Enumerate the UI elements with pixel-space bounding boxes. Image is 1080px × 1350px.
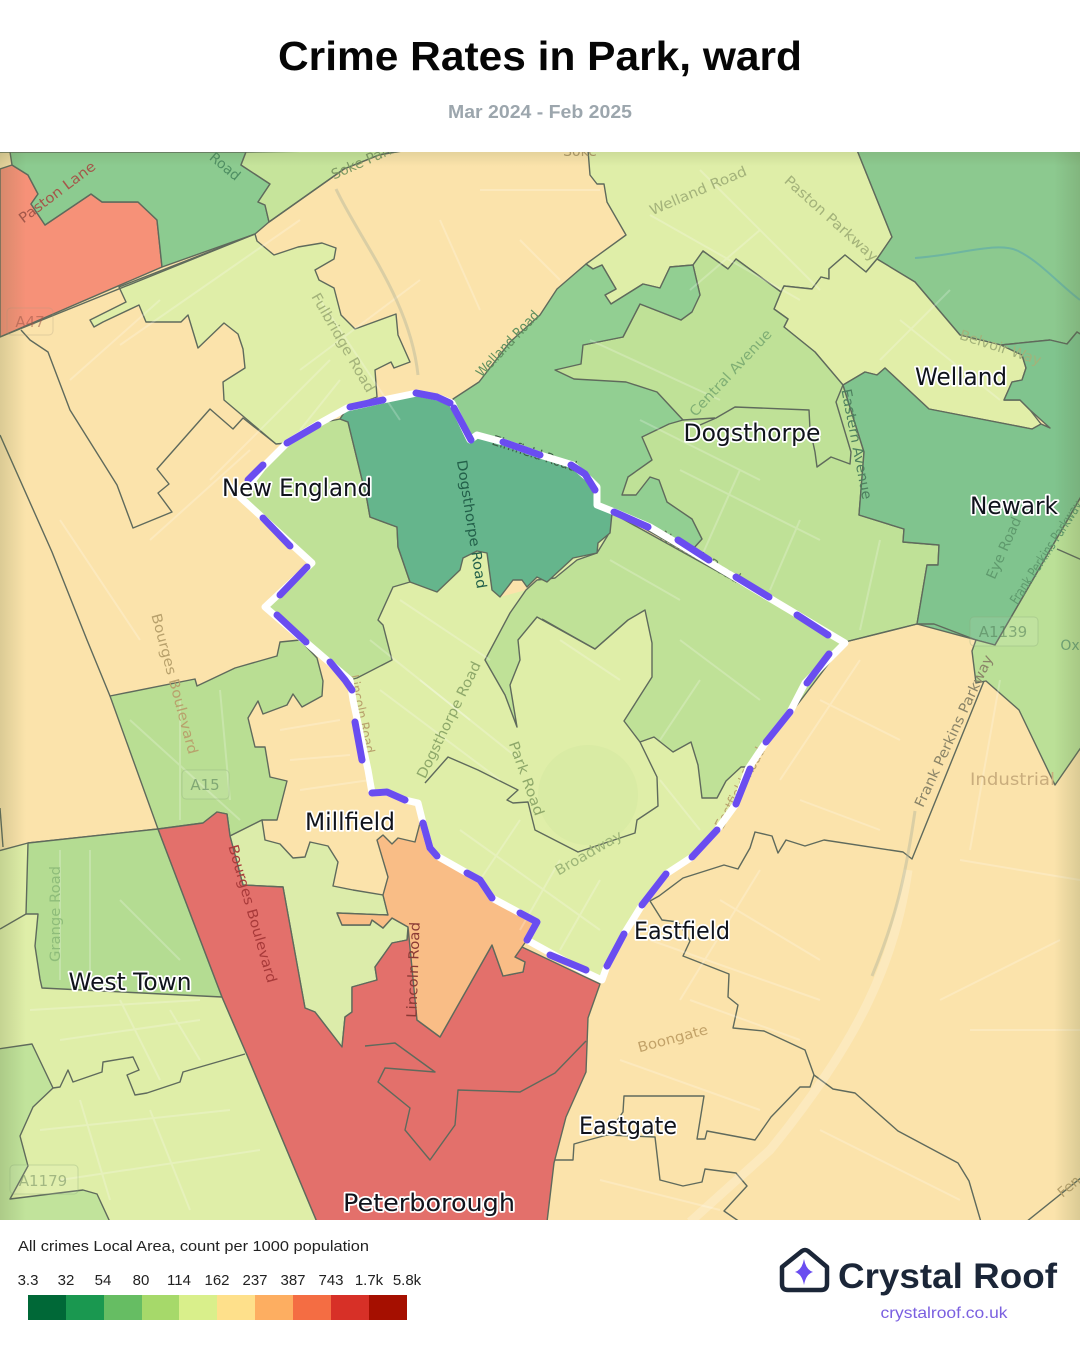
road labels: Eastfield Road <box>712 745 769 832</box>
road shield: A1139: A1139 <box>979 623 1027 641</box>
legend values: 162 <box>204 1272 230 1289</box>
road labels: Bourges Boulevard <box>147 612 200 756</box>
legend <box>18 1238 422 1320</box>
zone: pale Welland north <box>586 150 892 304</box>
place labels: Eastfield <box>634 917 730 945</box>
ward park area <box>538 745 638 845</box>
place labels: Peterborough <box>343 1189 515 1217</box>
zone: Newark green <box>843 332 1080 645</box>
wide road east <box>690 870 908 1222</box>
zone: pale Lincoln Road strip <box>230 820 408 1047</box>
road labels: Paston Parkway <box>781 173 881 265</box>
legend values: 237 <box>242 1272 268 1289</box>
river <box>915 247 1080 300</box>
road labels: Dogsthorpe Road <box>414 659 485 781</box>
place labels: Newark <box>970 492 1058 520</box>
zone: pale Welland <box>774 255 1050 432</box>
road labels: Bourges Boulevard <box>224 843 279 985</box>
road labels: Park Road <box>505 739 547 818</box>
area label: Industrial: Industrial <box>970 770 1055 790</box>
zone: pale Fulbridge <box>90 234 410 444</box>
road labels: Lincoln Road <box>404 922 424 1018</box>
zone: light green north <box>241 150 400 222</box>
zone: Bourges green <box>110 640 323 836</box>
road labels: Soke Parkway <box>329 129 424 183</box>
road labels: Lincoln Road <box>345 673 377 755</box>
road labels <box>16 129 1080 1201</box>
legend values: 387 <box>280 1272 306 1289</box>
title: Crime Rates in Park, ward <box>278 33 802 79</box>
zone: ward east light green <box>485 513 845 798</box>
place labels: Welland <box>915 363 1007 391</box>
road labels: Central Avenue <box>687 326 775 420</box>
road shield: A15 <box>182 770 229 799</box>
legend values: 114 <box>167 1272 191 1289</box>
place labels: Millfield <box>305 808 395 836</box>
road labels: Frank Perkins Parkway <box>912 653 997 810</box>
ward boundary: white casing <box>240 393 845 980</box>
place labels: West Town <box>68 968 192 996</box>
place labels: Eastgate <box>579 1112 677 1140</box>
legend values <box>18 1272 422 1289</box>
place labels: New England <box>222 474 372 502</box>
zone: ward west light green <box>240 419 410 680</box>
legend title: All crimes Local Area, count per 1000 population <box>18 1238 369 1255</box>
ward boundary: purple dashes <box>248 393 829 970</box>
road labels: Paston Lane <box>16 159 99 227</box>
road labels: Ox <box>1060 638 1080 654</box>
zone: ward pale base <box>354 538 744 975</box>
road shield: A1179 <box>10 1165 78 1194</box>
road shield: A1139 <box>970 617 1038 646</box>
legend values: 3.3 <box>18 1272 38 1289</box>
road labels: Soke <box>563 144 597 160</box>
road labels: Welland Road <box>473 308 543 381</box>
road network <box>30 170 1080 1210</box>
zone: green north-west <box>0 152 270 267</box>
road shield: A47 <box>7 308 53 335</box>
legend values: 743 <box>318 1272 344 1289</box>
website url: crystalroof.co.uk <box>880 1305 1009 1322</box>
legend colour scale <box>28 1295 407 1320</box>
road labels: Belvoir Way <box>957 327 1043 369</box>
road labels: Dogsthorpe Road <box>453 459 489 590</box>
legend values: 54 <box>95 1272 111 1289</box>
subtitle: date range: Mar 2024 - Feb 2025 <box>448 102 632 122</box>
zone: light green Dogsthorpe <box>555 251 939 642</box>
wordmark: Crystal Roof <box>838 1257 1057 1296</box>
icon: house with star <box>782 1250 827 1290</box>
boundary lines: sand and interior <box>0 148 1080 1222</box>
legend values: 80 <box>133 1272 149 1289</box>
logo: Crystal Roof <box>782 1250 1057 1322</box>
zone: West Town green <box>26 829 222 997</box>
zone: green north-east <box>857 150 1080 345</box>
road shield: A47: A47 <box>15 313 45 331</box>
zone: red city centre <box>158 812 600 1222</box>
road labels: Broadway <box>553 828 625 879</box>
legend values: 5.8k <box>393 1272 422 1289</box>
road shield: A15: A15 <box>190 776 220 794</box>
road labels: Boongate <box>636 1022 710 1056</box>
zone: mid green <box>453 264 702 549</box>
road labels: Elmfield Road <box>490 433 579 475</box>
zone: east light green <box>972 495 1080 785</box>
zone: salmon north-west <box>0 165 162 337</box>
zone: West Town pale <box>0 829 317 1222</box>
legend values: 32 <box>58 1272 74 1289</box>
road labels: Grange Road <box>48 866 64 962</box>
railway line grey <box>336 189 915 976</box>
road labels: Eastern Avenue <box>837 388 874 501</box>
road labels: Fulbridge Road <box>308 291 377 395</box>
road labels: Welland Road <box>647 164 749 219</box>
zone: south-west green <box>0 1044 110 1222</box>
zone: orange Millfield south <box>337 823 537 1037</box>
place labels <box>68 363 1058 1217</box>
legend values: 1.7k <box>355 1272 384 1289</box>
road labels: Newark Road <box>657 528 743 587</box>
road labels: Road <box>206 150 243 184</box>
place labels: Dogsthorpe <box>684 419 820 447</box>
road shield: A1179: A1179 <box>19 1172 67 1190</box>
road labels: Eye Road <box>984 515 1025 582</box>
zone: ward darkest green <box>340 393 612 597</box>
